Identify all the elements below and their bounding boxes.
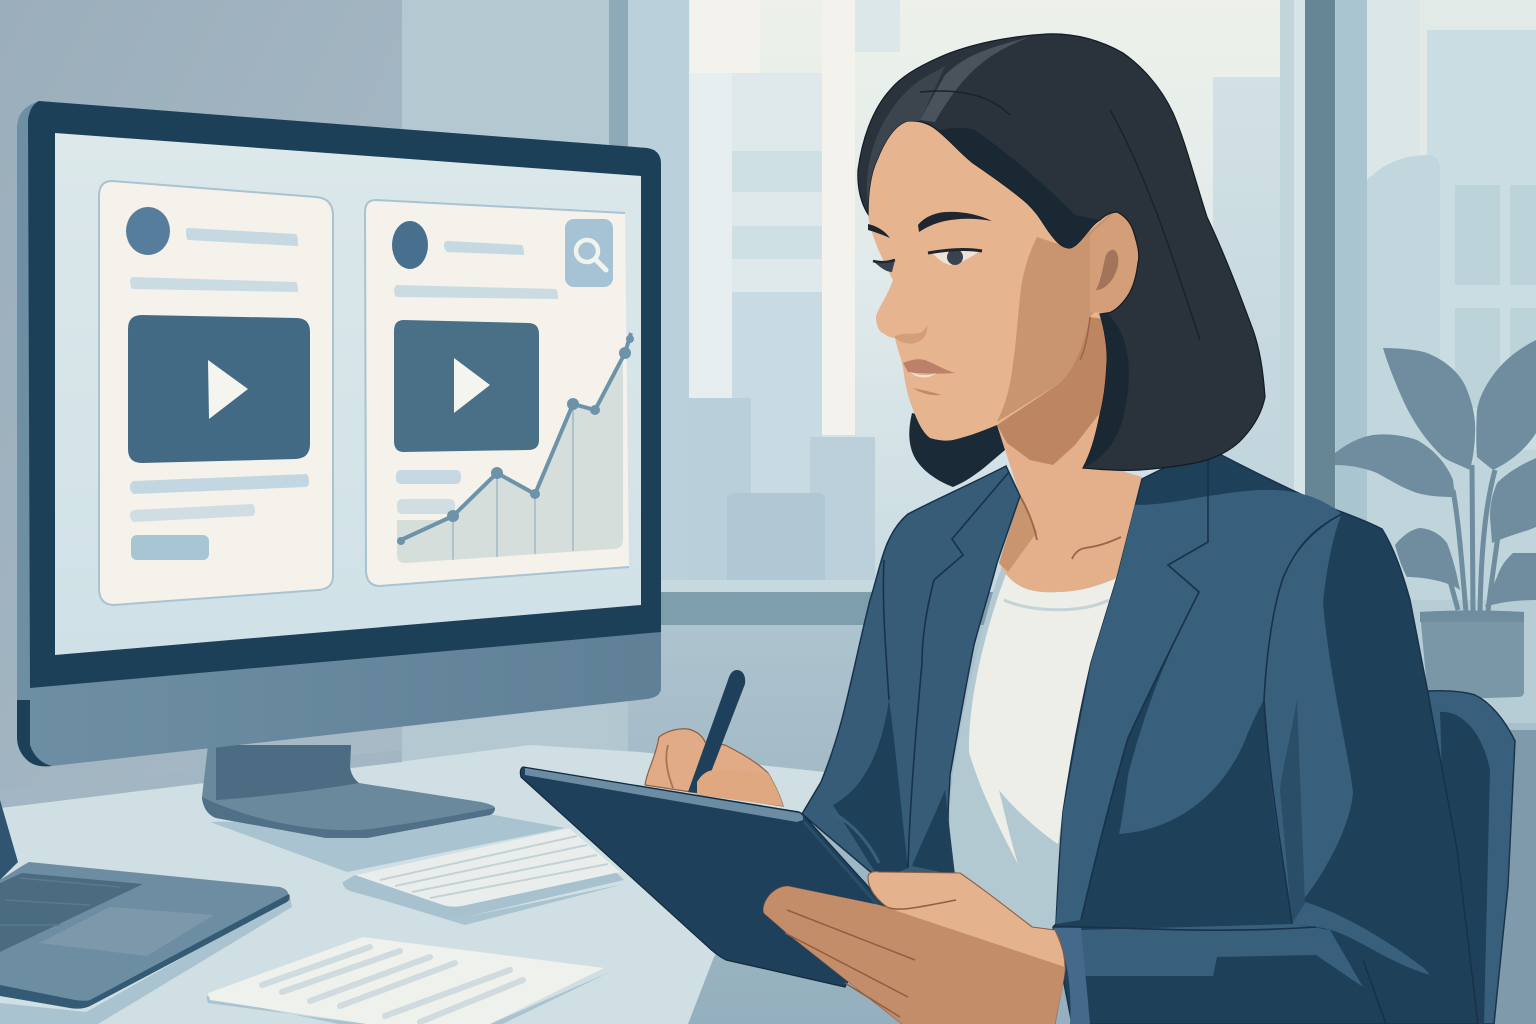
eyebrows [868, 212, 992, 238]
trackpad [39, 907, 214, 956]
screen [55, 133, 641, 655]
chair [1428, 691, 1515, 1024]
paper document [208, 937, 604, 1024]
lower hand holding tablet [764, 872, 1065, 1024]
panel: video card left [99, 181, 333, 605]
wall background [0, 0, 689, 820]
cuff [1053, 927, 1090, 1024]
seams [1053, 447, 1386, 1024]
window with city skyline [689, 0, 1305, 600]
under-jaw shadow [997, 317, 1110, 465]
hair back [909, 413, 1005, 487]
back edge and chin [17, 101, 661, 766]
jacket: wearer's left side [1053, 447, 1478, 1024]
hair [858, 34, 1265, 470]
monitor stand [202, 745, 495, 838]
desk [0, 745, 825, 1024]
bezel [28, 101, 661, 688]
leaves and stems [1335, 340, 1536, 607]
window sill [628, 580, 1536, 1024]
chest highlight [1119, 490, 1342, 834]
woman [520, 34, 1478, 1024]
ear [1090, 210, 1139, 313]
neck and chest [997, 314, 1142, 592]
keyboard deck [0, 873, 143, 952]
desk shadows [0, 815, 624, 1024]
upper hand writing [645, 729, 783, 806]
laptop base [0, 862, 290, 1009]
tablet [520, 767, 885, 987]
jacket: wearer's right side [802, 466, 1020, 880]
nose [895, 325, 927, 344]
play button [208, 360, 248, 419]
plant [1335, 340, 1536, 700]
play button [454, 358, 490, 413]
sleeve band [1081, 924, 1363, 987]
video thumbnail [394, 320, 539, 452]
panel: video card with chart [365, 200, 634, 586]
pot [1420, 610, 1524, 700]
avatar [126, 207, 170, 255]
line chart [397, 333, 634, 563]
white shirt [950, 566, 1117, 930]
window frame pillar [1305, 0, 1367, 640]
face [862, 100, 1125, 441]
lapel [1056, 496, 1208, 924]
eyes [873, 249, 982, 272]
monitor [17, 101, 661, 766]
screen edge [0, 800, 18, 880]
finger over pen [697, 770, 783, 806]
avatar [392, 221, 428, 269]
mouth [903, 359, 955, 395]
laptop [0, 800, 290, 1009]
sleeve highlight [1264, 514, 1430, 975]
video thumbnail [128, 315, 310, 463]
right window with towers [1367, 0, 1536, 640]
face shadow [997, 205, 1120, 422]
pen [688, 670, 745, 793]
search icon [565, 219, 613, 287]
keyboard [343, 828, 624, 918]
